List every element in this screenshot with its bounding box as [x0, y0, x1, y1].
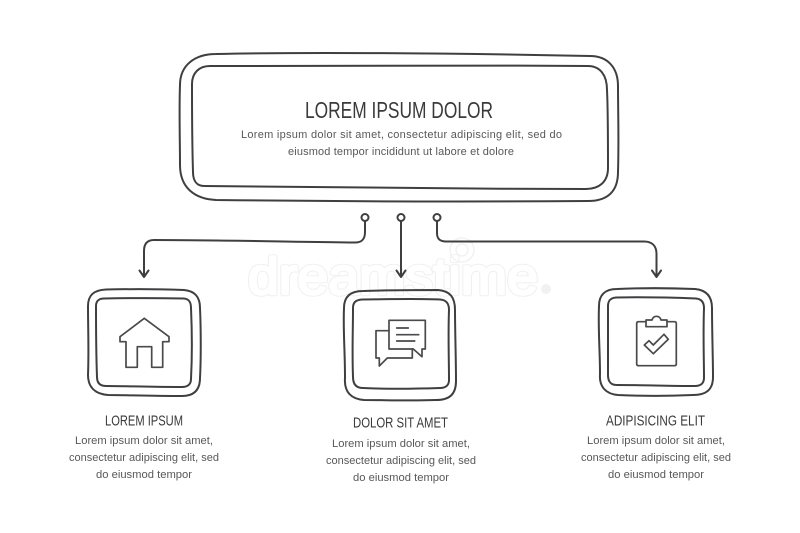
watermark: dreamstime [248, 248, 538, 306]
icon frame [599, 288, 713, 396]
heading: DOLOR SIT AMET [353, 414, 448, 432]
arrow: middle connector [396, 214, 406, 277]
panel: middle item [326, 290, 476, 484]
watermark: dreamstime [248, 248, 538, 306]
panel: left item [69, 289, 219, 481]
icon: house [120, 318, 169, 367]
text block: consectetur adipiscing elit, sed [69, 452, 219, 464]
arrow: left connector [140, 214, 368, 277]
text block: do eiusmod tempor [96, 469, 192, 481]
text block [326, 438, 476, 484]
text block: do eiusmod tempor [353, 472, 449, 484]
outer hand-drawn frame [180, 53, 618, 201]
text block: Lorem ipsum dolor sit amet, [75, 435, 213, 447]
description: eiusmod tempor incididunt ut labore et dolore [288, 146, 514, 158]
text block: do eiusmod tempor [608, 469, 704, 481]
heading: LOREM IPSUM [105, 412, 183, 430]
icon frame [88, 289, 201, 396]
title: LOREM IPSUM DOLOR [305, 97, 493, 123]
heading: ADIPISICING ELIT [606, 412, 705, 430]
text block: consectetur adipiscing elit, sed [581, 452, 731, 464]
text block [581, 435, 731, 481]
text block: Lorem ipsum dolor sit amet, [332, 438, 470, 450]
description: Lorem ipsum dolor sit amet, consectetur adipiscing elit, sed do [241, 129, 562, 141]
icon frame [344, 290, 456, 400]
panel: right item [581, 288, 731, 481]
icon: clipboard with check [637, 316, 676, 366]
inner hand-drawn frame [192, 65, 608, 189]
panel: main heading box [180, 53, 618, 201]
icon: chat bubbles [376, 320, 425, 366]
text block: Lorem ipsum dolor sit amet, [587, 435, 725, 447]
arrow: right connector [434, 214, 661, 277]
description [241, 129, 562, 158]
text block: consectetur adipiscing elit, sed [326, 455, 476, 467]
text block [69, 435, 219, 481]
